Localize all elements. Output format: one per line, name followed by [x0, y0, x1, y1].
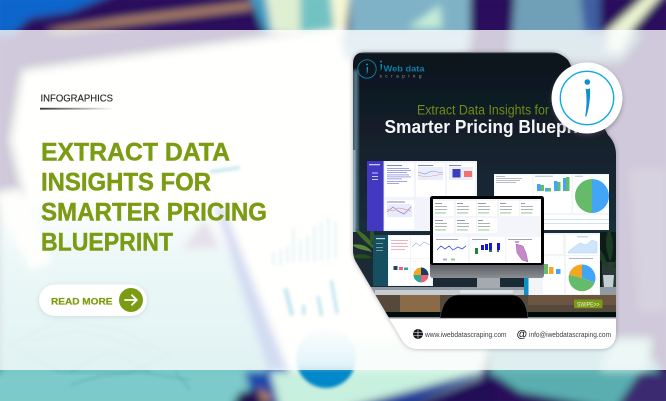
read more button: READ MORE	[51, 296, 113, 308]
pie chart	[575, 179, 609, 213]
logo badge	[552, 62, 622, 136]
dashboard: lower left	[373, 235, 433, 286]
icon: plant	[353, 229, 374, 258]
desktop monitor	[430, 196, 544, 288]
icon: at sign: @	[517, 329, 527, 341]
tag: INFOGRAPHICS	[40, 92, 114, 110]
pie chart	[414, 268, 428, 282]
card heading: Extract Data Insights for	[417, 102, 549, 118]
right lilac highlights	[606, 30, 632, 52]
title: SMARTER PRICING	[41, 199, 267, 227]
logo: scraping	[380, 74, 422, 78]
logo	[358, 60, 425, 78]
swipe badge: SWIPE>>	[577, 302, 600, 308]
panel: preview card	[350, 50, 622, 350]
office chair	[440, 295, 528, 318]
title: INSIGHTS FOR	[41, 169, 211, 197]
title: EXTRACT DATA	[41, 139, 230, 167]
dashboard: upper left	[367, 161, 477, 231]
icon: right plant	[600, 228, 616, 268]
dashboard: upper right	[494, 174, 609, 230]
tag: INFOGRAPHICS: INFOGRAPHICS	[40, 92, 113, 104]
footer contacts: www.iwebdatascraping.com	[424, 330, 506, 339]
logo: Web data	[384, 64, 425, 74]
read more button	[39, 284, 147, 316]
title	[41, 139, 267, 257]
faint bars and pie in the photo	[210, 166, 356, 388]
title: BLUEPRINT	[41, 229, 173, 257]
top-strip colours	[0, 0, 118, 34]
bottom strip	[0, 372, 250, 401]
paper sheets	[12, 28, 360, 380]
keyboard	[460, 290, 513, 293]
footer contacts: info@iwebdatascraping.com	[529, 330, 611, 339]
swipe badge	[574, 300, 602, 308]
card heading	[384, 102, 594, 137]
pie chart	[569, 264, 596, 291]
card heading: Smarter Pricing Blueprint	[384, 117, 594, 137]
icon: arrow	[119, 288, 143, 312]
background room	[350, 232, 620, 319]
footer contacts	[389, 318, 616, 349]
dashboard: lower right	[524, 233, 600, 295]
icon: globe	[413, 329, 423, 339]
